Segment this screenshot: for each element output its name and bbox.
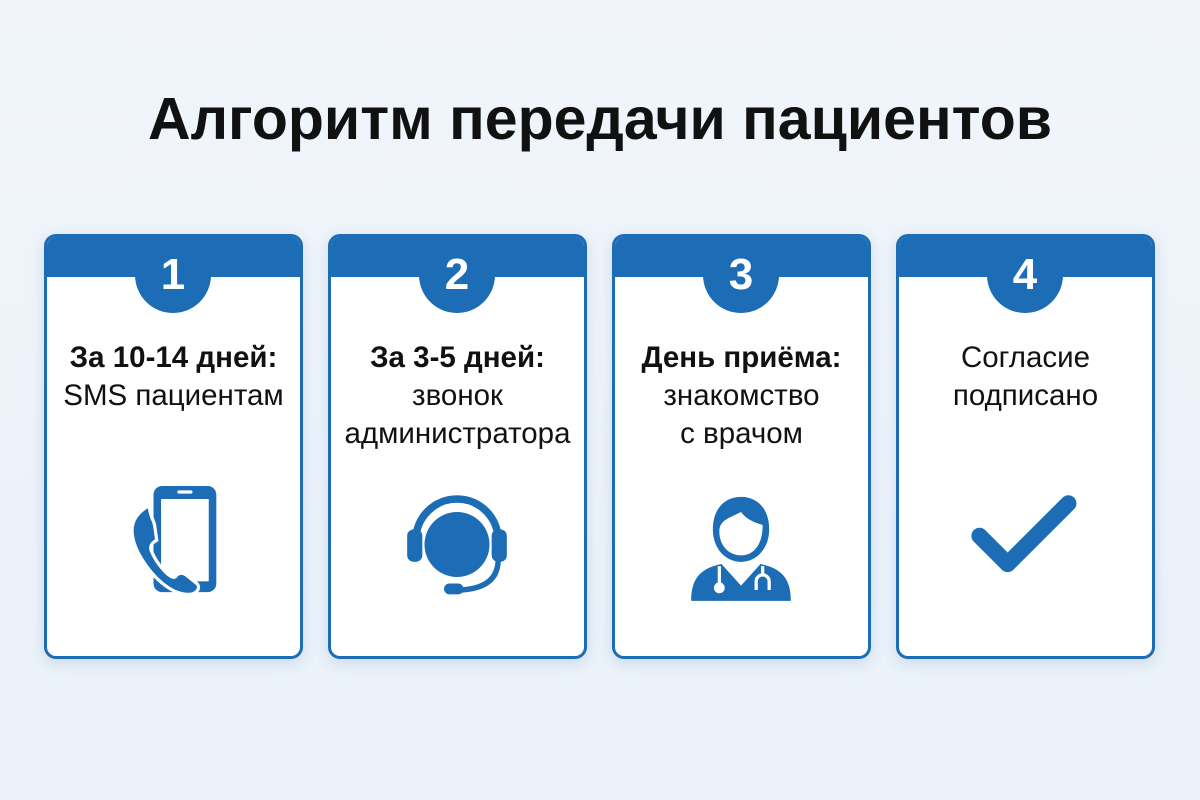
text step 1: За 10-14 дней: (70, 341, 277, 374)
number 1: 1 (161, 250, 185, 299)
text step 3 (642, 341, 841, 450)
text step 2: За 3-5 дней: (370, 341, 545, 374)
panel: step 4 (896, 234, 1155, 659)
number 2 (419, 237, 495, 313)
text step 4 (953, 341, 1098, 412)
title: Алгоритм передачи пациентов (148, 86, 1052, 152)
text step 4: Согласие (961, 341, 1090, 374)
text step 1 (63, 341, 284, 412)
text step 3: День приёма: (642, 341, 841, 374)
text step 3: знакомство (663, 379, 820, 412)
number 2: 2 (445, 250, 469, 299)
number 1 (135, 237, 211, 313)
icon: check (971, 495, 1076, 572)
panel: step 1 (44, 234, 303, 659)
icon: phone (134, 486, 216, 593)
number 4 (987, 237, 1063, 313)
text step 3: с врачом (680, 417, 803, 450)
text step 1: SMS пациентам (63, 379, 284, 412)
text step 2: звонок (412, 379, 503, 412)
number 3: 3 (729, 250, 753, 299)
icon: headset (407, 495, 507, 594)
panel: step 3 (612, 234, 871, 659)
number 4: 4 (1013, 250, 1037, 299)
icon: doctor (691, 496, 791, 601)
text step 4: подписано (953, 379, 1098, 412)
number 3 (703, 237, 779, 313)
text step 2 (344, 341, 571, 450)
text step 2: администратора (344, 417, 570, 450)
panel: step 2 (328, 234, 587, 659)
